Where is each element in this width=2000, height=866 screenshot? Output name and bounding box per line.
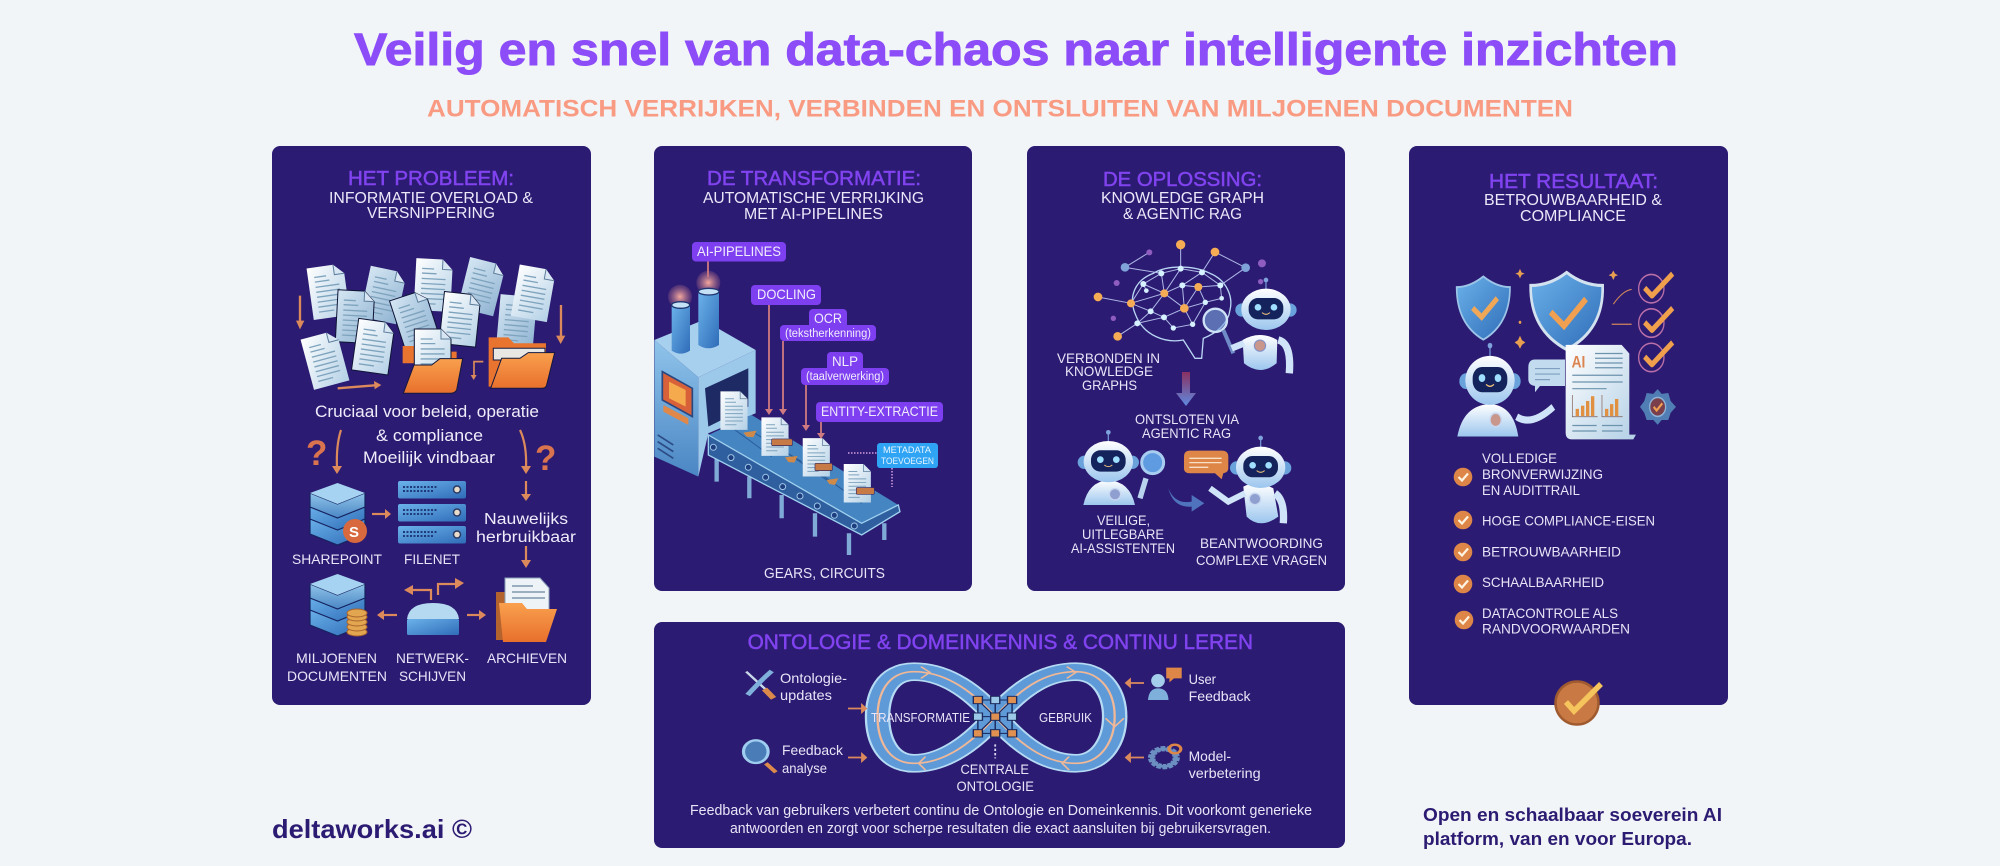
- heading: de transformatie: [703, 168, 924, 223]
- footer: tagline: Open en schaalbaar soeverein AI: [1423, 804, 1722, 825]
- footer: tagline: platform, van en voor Europa.: [1423, 828, 1692, 849]
- label: verbonden in knowledge graphs: KNOWLEDGE: [1065, 363, 1153, 379]
- icon: sharepoint server: S: [349, 524, 359, 541]
- list: result items with check marks: BRONVERWIJZING: [1482, 466, 1603, 482]
- label: nlp: NLP: [832, 353, 858, 369]
- heading: de transformatie: MET AI-PIPELINES: [744, 206, 883, 223]
- text: user feedback: Feedback: [1189, 688, 1252, 704]
- heading: de oplossing: [1101, 169, 1264, 223]
- label: metadata toevoegen: TOEVOEGEN: [881, 456, 934, 467]
- icon: scattered documents and folders: [296, 257, 565, 393]
- label: metadata toevoegen: [877, 443, 938, 468]
- labels: sharepoint, filenet, hardly reusable: Nauwelijks: [484, 511, 568, 528]
- labels: documents, network drives, archives: NETWERK-: [396, 650, 469, 666]
- description text: antwoorden en zorgt voor scherpe resultaten die exact aansluiten bij gebruikersvragen.: [730, 821, 1271, 837]
- label: ontsloten via agentic rag: [1135, 411, 1240, 441]
- label: beantwoording complexe vragen: [1196, 535, 1327, 568]
- illustration: factory and conveyor belt: [654, 271, 900, 555]
- heading: de oplossing: & AGENTIC RAG: [1123, 206, 1242, 223]
- heading: de oplossing: KNOWLEDGE GRAPH: [1101, 190, 1264, 207]
- list: result items with check marks: RANDVOORWAARDEN: [1482, 620, 1630, 636]
- list: result items with check marks: HOGE COMPLIANCE-EISEN: [1482, 512, 1655, 528]
- icon: sharepoint server: [310, 483, 367, 545]
- icon: tools: [746, 671, 774, 698]
- labels: sharepoint, filenet, hardly reusable: SHAREPOINT: [292, 551, 382, 567]
- heading: het resultaat: HET RESULTAAT:: [1489, 171, 1658, 193]
- list: result items with check marks: VOLLEDIGE: [1482, 450, 1557, 466]
- text: crucial for policy: Moeilijk vindbaar: [363, 448, 495, 467]
- labels inside infinity loop: [871, 710, 1092, 794]
- labels: sharepoint, filenet, hardly reusable: FILENET: [404, 551, 460, 567]
- heading: ontologie: ONTOLOGIE & DOMEINKENNIS & CONTINU LEREN: [748, 631, 1253, 654]
- label: nlp: (taalverwerking): [806, 371, 884, 383]
- text: feedback analyse: analyse: [782, 760, 827, 776]
- heading: de oplossing: DE OPLOSSING:: [1103, 169, 1262, 191]
- text: ontologie-updates: updates: [780, 687, 832, 703]
- label: ocr: (tekstherkenning): [785, 328, 871, 340]
- labels: documents, network drives, archives: DOCUMENTEN: [287, 668, 387, 684]
- icon: gears: [1152, 745, 1181, 767]
- icon: network drive: [407, 603, 459, 635]
- arrow: from graph to agentic rag: [1176, 372, 1196, 406]
- list: result items with check marks: BETROUWBAARHEID: [1482, 544, 1621, 560]
- heading: het probleem: INFORMATIE OVERLOAD &: [329, 190, 533, 207]
- label: veilige uitlegbare ai-assistenten: UITLEGBARE: [1082, 526, 1164, 542]
- footer: tagline: [1423, 804, 1722, 849]
- text: feedback analyse: [782, 742, 844, 776]
- icon: user with speech bubble: [1148, 668, 1182, 700]
- text: model-verbetering: Model-: [1189, 748, 1231, 764]
- label: veilige uitlegbare ai-assistenten: AI-ASSISTENTEN: [1071, 540, 1175, 556]
- icon: question marks and flow arrows: ?: [535, 439, 556, 478]
- text: crucial for policy: Cruciaal voor beleid, operatie: [315, 402, 539, 421]
- heading: de transformatie: DE TRANSFORMATIE:: [707, 168, 921, 190]
- heading: het resultaat: BETROUWBAARHEID &: [1484, 192, 1662, 209]
- list: result items with check marks: SCHAALBAARHEID: [1482, 574, 1604, 590]
- text: model-verbetering: verbetering: [1189, 765, 1261, 781]
- heading: het resultaat: COMPLIANCE: [1520, 208, 1626, 225]
- panel: de oplossing: [1027, 146, 1345, 591]
- panel: het resultaat: [1409, 146, 1728, 705]
- labels inside infinity loop: TRANSFORMATIE: [871, 710, 970, 725]
- heading: de transformatie: AUTOMATISCHE VERRIJKING: [703, 190, 924, 207]
- icon: filenet racks: [398, 481, 466, 544]
- label: veilige uitlegbare ai-assistenten: [1071, 512, 1175, 556]
- text: feedback analyse: Feedback: [782, 742, 844, 758]
- labels inside infinity loop: GEBRUIK: [1039, 710, 1092, 725]
- labels: documents, network drives, archives: [287, 650, 567, 684]
- icon: archive folder: [496, 578, 557, 642]
- labels: sharepoint, filenet, hardly reusable: [292, 511, 576, 567]
- heading: het probleem: [329, 168, 533, 222]
- label: verbonden in knowledge graphs: GRAPHS: [1082, 377, 1137, 393]
- label: beantwoording complexe vragen: BEANTWOORDING: [1200, 535, 1323, 551]
- label: entity-extractie: ENTITY-EXTRACTIE: [821, 403, 938, 419]
- illustration: knowledge graph brain: [1094, 240, 1266, 358]
- text: ontologie-updates: [780, 670, 847, 703]
- label: ontsloten via agentic rag: ONTSLOTEN VIA: [1135, 411, 1240, 427]
- description text: [690, 803, 1312, 837]
- caption: gears, circuits: GEARS, CIRCUITS: [764, 565, 885, 582]
- icon: large check badge: [1556, 682, 1601, 724]
- label: nlp: [801, 352, 889, 385]
- label: docling: DOCLING: [757, 286, 816, 302]
- labels: sharepoint, filenet, hardly reusable: herbruikbaar: [476, 529, 576, 546]
- panel: het probleem: [272, 146, 591, 705]
- description text: Feedback van gebruikers verbetert continu de Ontologie en Domeinkennis. Dit voorkomt generieke: [690, 803, 1312, 819]
- label: beantwoording complexe vragen: COMPLEXE VRAGEN: [1196, 552, 1327, 568]
- connector lines: pipeline labels to documents: [708, 261, 892, 487]
- heading: het resultaat: [1484, 171, 1662, 225]
- label: ontsloten via agentic rag: AGENTIC RAG: [1142, 425, 1231, 441]
- panel: de transformatie: [654, 146, 972, 591]
- labels: documents, network drives, archives: MILJOENEN: [296, 650, 377, 666]
- labels: documents, network drives, archives: ARCHIEVEN: [487, 650, 567, 666]
- label: veilige uitlegbare ai-assistenten: VEILIGE,: [1097, 512, 1150, 528]
- icon: magnifier: [743, 740, 776, 772]
- list: result items with check marks: EN AUDITTRAIL: [1482, 482, 1580, 498]
- list: result items with check marks: [1454, 450, 1655, 636]
- diagram: infinity loop: [878, 667, 1124, 770]
- text: user feedback: [1189, 671, 1252, 704]
- arrows: inputs to infinity loop: [848, 680, 1144, 761]
- labels inside infinity loop: CENTRALE: [960, 761, 1029, 777]
- label: verbonden in knowledge graphs: VERBONDEN IN: [1057, 350, 1160, 366]
- icon: robot with magnifier: [1232, 278, 1297, 373]
- text: ontologie-updates: Ontologie-: [780, 670, 847, 686]
- heading: het probleem: VERSNIPPERING: [367, 205, 495, 222]
- text: model-verbetering: [1189, 748, 1261, 781]
- label: metadata toevoegen: METADATA: [883, 445, 932, 456]
- label: verbonden in knowledge graphs: [1057, 350, 1160, 393]
- footer: brand: deltaworks.ai ©: [272, 814, 472, 844]
- subtitle: AUTOMATISCH VERRIJKEN, VERBINDEN EN ONTSLUITEN VAN MILJOENEN DOCUMENTEN: [427, 96, 1573, 123]
- icon: robot assistants with speech bubble: [1078, 430, 1291, 523]
- title: Veilig en snel van data-chaos naar intelligente inzichten: [354, 24, 1678, 75]
- list: result items with check marks: DATACONTROLE ALS: [1482, 605, 1618, 621]
- panel: ontologie en continu leren: [654, 622, 1345, 848]
- illustration: shields, robot and ai report: AI: [1572, 354, 1585, 372]
- label: ocr: [780, 309, 876, 341]
- labels: documents, network drives, archives: SCHIJVEN: [399, 668, 466, 684]
- label: ai-pipelines: AI-PIPELINES: [697, 243, 781, 259]
- connector arrowheads: [765, 409, 825, 439]
- heading: het probleem: HET PROBLEEM:: [348, 168, 514, 190]
- labels inside infinity loop: ONTOLOGIE: [956, 778, 1034, 794]
- text: user feedback: User: [1189, 671, 1216, 687]
- text: crucial for policy: [315, 402, 539, 467]
- icon: question marks and flow arrows: ?: [306, 434, 327, 473]
- icon: question marks and flow arrows: [306, 430, 556, 620]
- label: ocr: OCR: [814, 310, 842, 326]
- text: crucial for policy: & compliance: [376, 426, 483, 445]
- icon: database stack with coins: [310, 574, 367, 636]
- illustration: shields, robot and ai report: [1457, 269, 1676, 439]
